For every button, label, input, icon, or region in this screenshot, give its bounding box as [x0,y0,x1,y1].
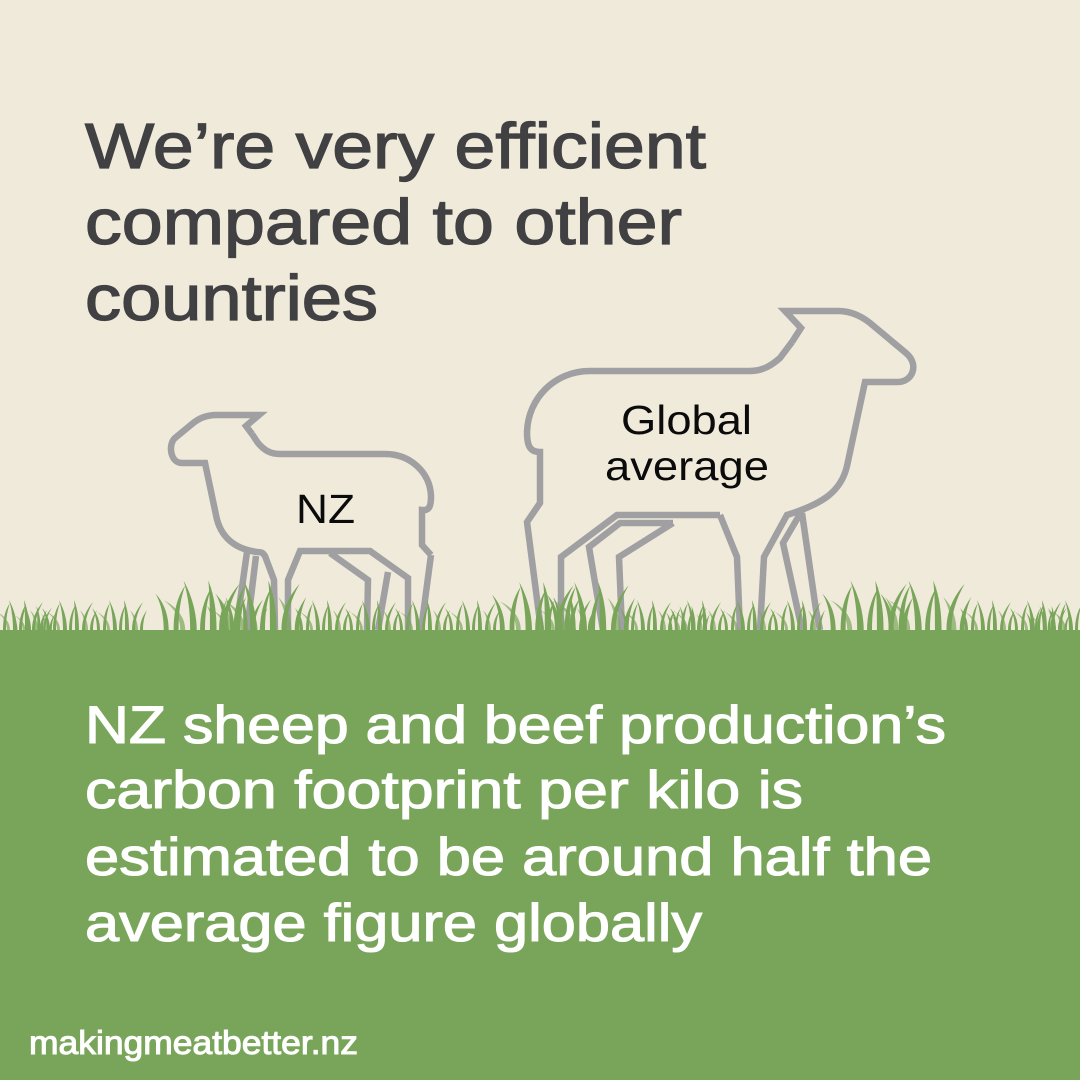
green ground panel [0,630,1080,1080]
label: Global average [605,397,769,489]
body statement: NZ sheep and beef production’s [85,696,946,755]
title: compared to other [85,186,682,258]
body statement: carbon footprint per kilo is [85,761,803,820]
title: We’re very efficient [85,110,706,182]
body statement: average figure globally [85,894,703,953]
label: Global average: average [605,443,769,489]
icon: global average sheep outline [527,311,913,630]
icon: NZ sheep outline [171,415,431,630]
label: Global average: Global [621,397,752,443]
grass strip [0,580,1080,630]
footer url: makingmeatbetter.nz [29,1024,358,1061]
body statement [85,696,946,953]
title [85,110,706,334]
body statement: estimated to be around half the [85,828,932,887]
title: countries [85,262,378,334]
label: NZ: NZ [296,486,355,532]
